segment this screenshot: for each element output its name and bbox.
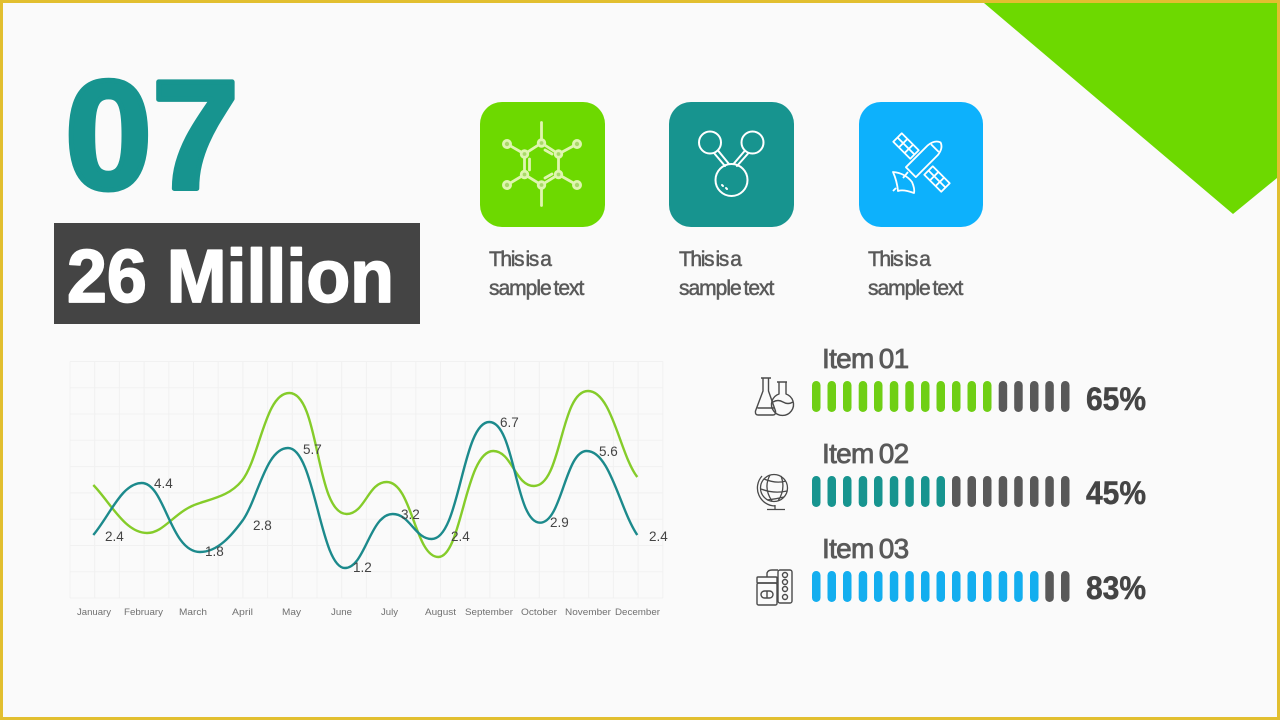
caption 3: [868, 248, 964, 300]
data labels: 1.2: [353, 560, 372, 575]
icon: globe: [757, 474, 788, 510]
headline banner: 26 Million: [67, 234, 394, 318]
item 02 row: [757, 438, 1146, 511]
value 65%: 65%: [1086, 381, 1146, 417]
icon: medicine bottle and pills: [757, 570, 792, 605]
month axis labels: June: [331, 607, 352, 618]
series: teal line: [93, 422, 637, 568]
progress bar 83%: [812, 571, 1070, 602]
month axis labels: May: [282, 607, 301, 618]
month axis labels: October: [521, 607, 557, 618]
data labels: 6.7: [500, 415, 519, 430]
item 01 label: Item 01: [822, 343, 909, 374]
caption 3: sample text: [868, 277, 964, 300]
data labels: 2.9: [550, 515, 569, 530]
month axis labels: January: [77, 607, 111, 618]
data labels: [105, 415, 668, 575]
tile: molecule hexagon: [480, 102, 605, 227]
caption 2: sample text: [679, 277, 775, 300]
item 03 row: [757, 533, 1146, 606]
data labels: 2.4: [105, 529, 124, 544]
data labels: 3.2: [401, 507, 420, 522]
caption 1: This is a: [489, 248, 552, 271]
icon: flasks: [755, 378, 794, 415]
caption 2: [679, 248, 775, 300]
progress bar 45%: [812, 476, 1070, 507]
data labels: 5.7: [303, 442, 322, 457]
series: green line: [93, 391, 637, 557]
tile: satellite: [859, 102, 983, 227]
corner triangle: [984, 3, 1277, 214]
month axis labels: August: [425, 607, 456, 618]
big number 07: 07: [65, 48, 239, 222]
month axis labels: April: [232, 607, 253, 618]
value 45%: 45%: [1086, 475, 1146, 511]
line chart: [70, 362, 668, 618]
progress bar 65%: [812, 381, 1070, 412]
data labels: 2.8: [253, 518, 272, 533]
month axis labels: [77, 607, 660, 618]
data labels: 1.8: [205, 544, 224, 559]
item 03 label: Item 03: [822, 533, 909, 564]
data labels: 5.6: [599, 444, 618, 459]
caption 1: sample text: [489, 277, 585, 300]
data labels: 2.4: [649, 529, 668, 544]
data labels: 4.4: [154, 476, 173, 491]
tile: three-atom molecule: [669, 102, 794, 227]
month axis labels: September: [465, 607, 513, 618]
month axis labels: July: [381, 607, 398, 618]
data labels: 2.4: [451, 529, 470, 544]
caption 1: [489, 248, 585, 300]
month axis labels: November: [565, 607, 611, 618]
caption 2: This is a: [679, 248, 742, 271]
item 01 row: [755, 343, 1146, 417]
caption 3: This is a: [868, 248, 931, 271]
month axis labels: December: [615, 607, 660, 618]
month axis labels: February: [124, 607, 163, 618]
month axis labels: March: [179, 607, 207, 618]
item 02 label: Item 02: [822, 438, 909, 469]
value 83%: 83%: [1086, 570, 1146, 606]
